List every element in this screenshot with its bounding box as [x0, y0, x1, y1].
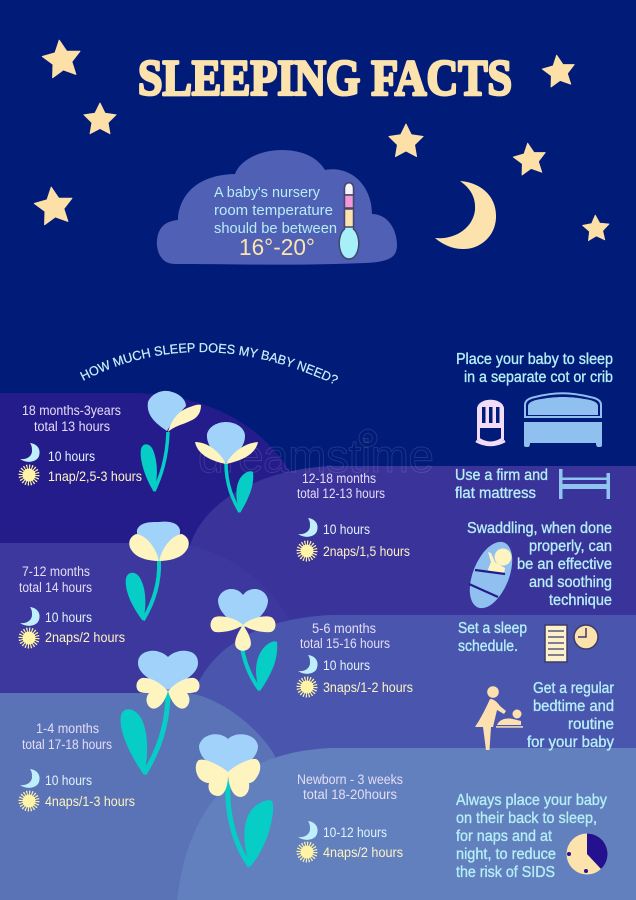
- tip: regular bedtime: Get a regular: [533, 680, 614, 697]
- age block: 5-6 months: [298, 621, 413, 695]
- flower 3: [126, 522, 189, 621]
- band: 5-6 months: [195, 615, 636, 760]
- tip: separate cot: in a separate cot or crib: [464, 369, 613, 386]
- cloud text: A baby's nursery: [214, 184, 320, 201]
- age block: 5-6 months: 10 hours: [323, 658, 370, 673]
- flower 6: [196, 734, 273, 867]
- cloud text: should be between: [214, 220, 337, 237]
- age block: 18 months-3 years: [20, 403, 142, 484]
- age block: 7-12 months: total 14 hours: [19, 580, 92, 595]
- watermark: dreamstime: [198, 430, 434, 482]
- age block: 12-18 months: 2naps/1,5 hours: [323, 544, 410, 559]
- tip: swaddling: Swaddling, when done: [467, 520, 612, 537]
- crescent moon: [435, 181, 496, 249]
- age block: newborn: Newborn - 3 weeks: [297, 772, 403, 787]
- tip: regular bedtime: [527, 680, 614, 751]
- tip: swaddling: properly, can: [529, 538, 612, 555]
- tip: back to sleep: the risk of SIDS: [456, 864, 555, 881]
- tip: back to sleep: Always place your baby: [456, 792, 607, 809]
- tip: separate cot: Place your baby to sleep: [456, 351, 613, 368]
- age block: 1-4 months: total 17-18 hours: [22, 737, 112, 752]
- age block: 1-4 months: 4naps/1-3 hours: [45, 794, 135, 809]
- age block: 7-12 months: 10 hours: [45, 610, 92, 625]
- age block: 12-18 months: [297, 471, 410, 559]
- curved heading: HOW MUCH SLEEP DOES MY BABY NEED?: [80, 343, 338, 384]
- band: 1-4 months: [0, 693, 275, 900]
- flower 2: [195, 422, 258, 513]
- icon: crib: [476, 400, 505, 445]
- tip: swaddling: be an effective: [517, 556, 612, 573]
- tip: back to sleep: [456, 792, 607, 881]
- age block: 7-12 months: 2naps/2 hours: [45, 630, 125, 645]
- tip: firm mattress: Use a firm and: [455, 467, 548, 484]
- tip: swaddling: [467, 520, 612, 609]
- icon: parent and baby: [475, 686, 523, 750]
- band: newborn: [177, 748, 636, 900]
- age block: 18 months-3 years: 10 hours: [48, 449, 95, 464]
- age block: 1-4 months: 10 hours: [45, 773, 92, 788]
- age block: 12-18 months: total 12-13 hours: [297, 486, 385, 501]
- cloud text: [214, 184, 337, 260]
- flower 5: [121, 651, 200, 775]
- age block: 5-6 months: 5-6 months: [312, 621, 376, 636]
- cloud text: 16°-20°: [239, 234, 315, 260]
- tip: sleep schedule: schedule.: [458, 638, 518, 655]
- icon: bed: [524, 393, 602, 447]
- tip: back to sleep: on their back to sleep,: [456, 810, 597, 827]
- tip: separate cot: [456, 351, 613, 386]
- tip: regular bedtime: for your baby: [527, 734, 614, 751]
- icon: schedule and clock: [545, 625, 598, 662]
- age block: 12-18 months: 10 hours: [323, 522, 370, 537]
- age block: 5-6 months: total 15-16 hours: [300, 636, 390, 651]
- stars: [32, 38, 610, 241]
- tip: sleep schedule: [458, 620, 527, 655]
- age block: newborn: 10-12 hours: [323, 825, 387, 840]
- flower 1: [141, 391, 201, 492]
- age block: newborn: [297, 772, 403, 860]
- age block: 7-12 months: [19, 564, 125, 646]
- age block: 1-4 months: [20, 721, 135, 809]
- band: 12-18 months: [190, 466, 636, 700]
- tip: regular bedtime: bedtime and: [533, 698, 614, 715]
- age block: 18 months-3 years: total 13 hours: [34, 419, 110, 434]
- age block: 18 months-3 years: 18 months-3years: [22, 403, 121, 418]
- flower 4: [210, 589, 277, 691]
- icon: pie clock: [566, 833, 608, 874]
- tip: regular bedtime: routine: [568, 716, 614, 733]
- tip: sleep schedule: Set a sleep: [458, 620, 527, 637]
- age block: 1-4 months: 1-4 months: [36, 721, 99, 736]
- age block: 18 months-3 years: 1nap/2,5-3 hours: [48, 469, 142, 484]
- icon: swaddled baby: [461, 536, 521, 614]
- tip: back to sleep: for naps and at: [456, 828, 553, 845]
- age block: 7-12 months: 7-12 months: [22, 564, 90, 579]
- icon: mattress bed: [559, 469, 610, 499]
- band: 18 months-3 years: [0, 393, 292, 545]
- tip: swaddling: technique: [549, 592, 612, 609]
- cloud text: room temperature: [214, 202, 333, 219]
- tip: firm mattress: [455, 467, 548, 502]
- age block: 5-6 months: 3naps/1-2 hours: [323, 680, 413, 695]
- title: SLEEPING FACTS: [138, 51, 512, 107]
- tip: swaddling: and soothing: [529, 574, 612, 591]
- icon: thermometer: [339, 183, 359, 259]
- age block: newborn: total 18-20hours: [303, 787, 397, 802]
- age block: 12-18 months: 12-18 months: [302, 471, 376, 486]
- cloud: nursery temperature: [157, 150, 397, 265]
- tip: back to sleep: night, to reduce: [456, 846, 556, 863]
- tip: firm mattress: flat mattress: [455, 485, 536, 502]
- band: 7-12 months: [0, 543, 292, 700]
- age block: newborn: 4naps/2 hours: [323, 845, 403, 860]
